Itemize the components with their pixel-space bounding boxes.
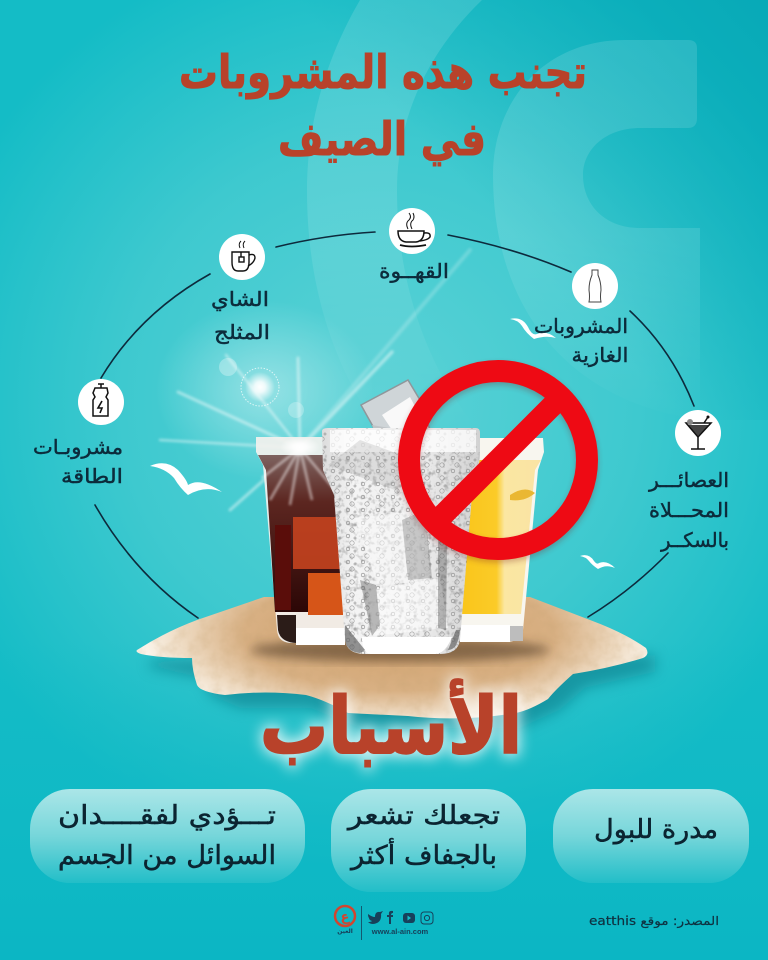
heading: reasons: الأسباب <box>260 680 522 772</box>
label: soft drinks <box>534 314 628 367</box>
label: energy drinks <box>33 435 123 488</box>
title: في الصيف <box>278 112 486 166</box>
footer logo: العين <box>337 928 353 935</box>
footer logo <box>335 906 355 935</box>
arcs connecting the icons <box>95 232 694 618</box>
label: energy drinks: الطاقة <box>61 464 123 488</box>
label: iced tea: الشاي <box>211 287 269 312</box>
soda glass <box>322 428 480 654</box>
label: sweetened juices: بالسكــر <box>660 528 729 552</box>
bird left <box>150 463 222 495</box>
panel: causes fluid loss: السوائل من الجسم <box>58 841 276 871</box>
drinks illustration <box>256 380 544 654</box>
label: energy drinks: مشروبـات <box>33 435 123 459</box>
label: sweetened juices: المحـــلاة <box>649 498 729 522</box>
watermark: large logo shape <box>307 0 700 440</box>
social icons <box>368 911 433 924</box>
footer divider <box>360 906 362 940</box>
icon node: tea <box>219 234 265 280</box>
label: iced tea: المثلج <box>214 320 270 344</box>
cola glass <box>256 437 345 645</box>
label: soft drinks: الغازية <box>572 343 628 367</box>
label: iced tea <box>211 287 270 344</box>
bird behind soda label <box>510 318 556 339</box>
label: sweetened juices <box>648 468 729 552</box>
panel: causes dehydration: بالجفاف أكثر <box>349 837 497 871</box>
icon node: coffee <box>389 208 435 254</box>
panel: causes dehydration: تجعلك تشعر <box>346 801 500 831</box>
title: تجنب هذه المشروبات <box>179 45 587 99</box>
juice glass <box>460 438 544 642</box>
panel: causes fluid loss: تـــؤدي لفقــــدان <box>58 801 276 831</box>
panel: causes fluid loss <box>30 789 305 883</box>
label: sweetened juices: العصائـــر <box>648 468 729 492</box>
sand puddle with shadow <box>136 597 655 728</box>
website url: www.al-ain.com <box>371 927 429 936</box>
panel: diuretic: مدرة للبول <box>594 815 718 845</box>
label: coffee: القهــوة <box>379 259 449 283</box>
heading: reasons: الأسباب <box>260 680 522 772</box>
title <box>179 45 587 166</box>
source: المصدر: موقع eatthis <box>589 914 719 929</box>
icon node: cocktail <box>675 410 721 456</box>
panel: causes dehydration <box>331 789 526 892</box>
icon node: energy drink <box>78 379 124 425</box>
prohibition sign <box>409 371 587 552</box>
ice cubes above glass <box>361 380 442 455</box>
icon node: soda <box>572 263 618 309</box>
lens flare <box>155 250 470 510</box>
bird right <box>580 555 615 569</box>
panel: diuretic <box>553 789 749 883</box>
label: soft drinks: المشروبات <box>534 314 628 338</box>
footer logo: ع <box>341 910 351 925</box>
